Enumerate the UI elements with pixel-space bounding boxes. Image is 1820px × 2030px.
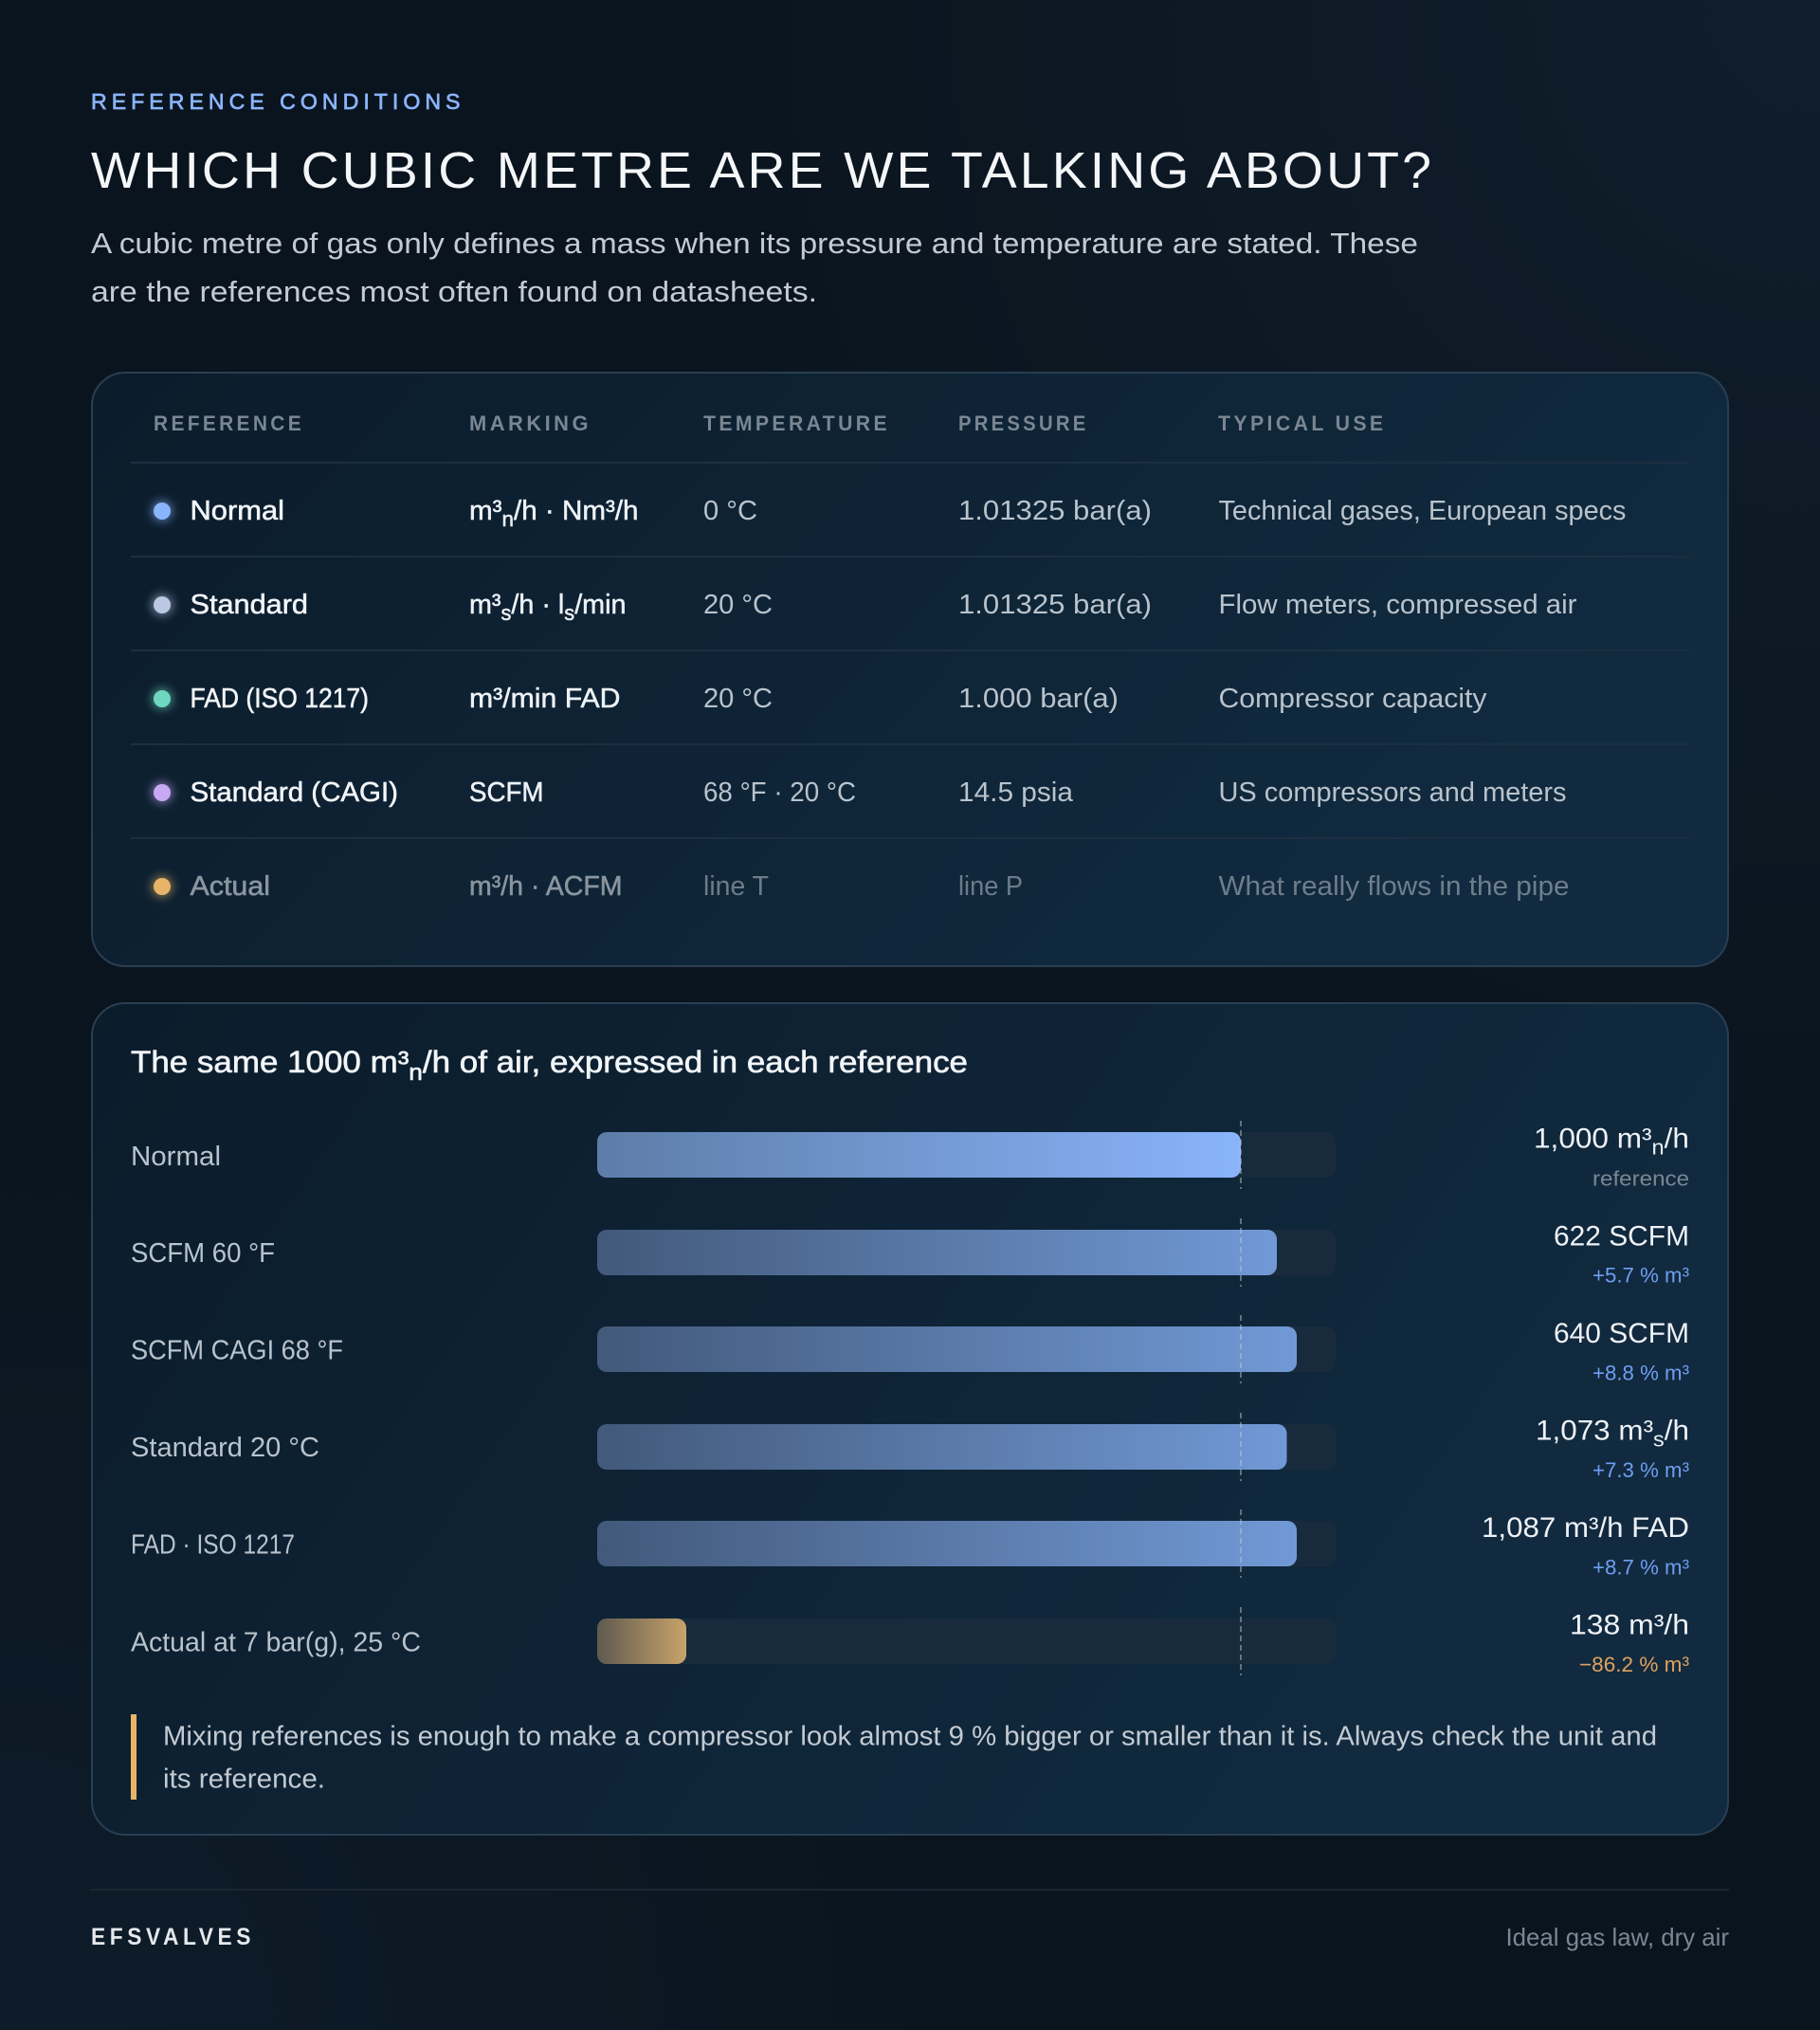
icon: grey-blue dot [152, 594, 173, 615]
subtitle: A cubic metre of gas only defines a mass when its pressure and temperature are stated. These [91, 227, 1418, 260]
row: normal: n [502, 507, 514, 531]
row: normal [152, 496, 1627, 531]
icon: amber dot [152, 876, 173, 897]
row: normal: Technical gases, European specs [1219, 496, 1627, 526]
row: standard CAGI: SCFM [469, 777, 544, 808]
subtitle [91, 227, 1418, 308]
bar row: actual [131, 1607, 1689, 1676]
bar row: FAD: 1,087 m³/h FAD [1482, 1512, 1689, 1544]
row: standard: 20 °C [703, 590, 773, 620]
row: actual: Actual [190, 871, 270, 902]
row: standard: s [564, 601, 574, 625]
bar row: FAD [131, 1509, 1689, 1580]
bar row: normal: /h [1665, 1123, 1689, 1155]
bar row: SCFM CAGI [131, 1315, 1689, 1384]
row: FAD: FAD (ISO 1217) [190, 684, 369, 714]
bar row: SCFM 60F: 622 SCFM [1554, 1221, 1689, 1252]
bar row: standard: +7.3 % m³ [1592, 1458, 1689, 1482]
table header: REFERENCE [154, 411, 304, 435]
bar row: standard: /h [1665, 1415, 1689, 1447]
icon: teal dot [152, 688, 173, 709]
row: normal: Normal [190, 496, 284, 526]
bar row: SCFM CAGI: SCFM CAGI 68 °F [131, 1335, 343, 1365]
bar row: FAD: FAD · ISO 1217 [131, 1530, 295, 1561]
row: actual: line T [703, 871, 769, 902]
bar row: standard: Standard 20 °C [131, 1433, 319, 1463]
row: normal: 0 °C [703, 496, 757, 526]
table header: TEMPERATURE [703, 411, 890, 435]
row: standard CAGI [152, 777, 1566, 808]
row: standard: 1.01325 bar(a) [958, 590, 1152, 620]
bar row: standard [131, 1413, 1689, 1482]
bar row: standard: 1,073 m³ [1536, 1415, 1646, 1447]
bar row: normal: 1,000 m³ [1534, 1123, 1644, 1155]
row: normal: /h · Nm³/h [514, 496, 639, 526]
title: WHICH CUBIC METRE ARE WE TALKING ABOUT? [91, 142, 1434, 199]
row: standard CAGI: 14.5 psia [958, 777, 1074, 808]
callout [131, 1714, 1657, 1800]
bar row: normal: n [1652, 1136, 1665, 1159]
bar row: normal: reference [1592, 1166, 1689, 1191]
footer note: Ideal gas law, dry air [1505, 1923, 1729, 1951]
row: FAD: Compressor capacity [1219, 684, 1487, 714]
row: FAD [152, 684, 1487, 714]
row: actual [152, 871, 1570, 902]
row: standard CAGI: 68 °F · 20 °C [703, 777, 856, 808]
table header: TYPICAL USE [1218, 411, 1386, 435]
row: standard: /h · l [511, 590, 564, 620]
row: FAD: m³/min FAD [469, 684, 620, 714]
row: actual: m³/h · ACFM [469, 871, 622, 902]
table header: MARKING [469, 411, 592, 435]
chart heading: n [409, 1060, 423, 1086]
table header [154, 411, 1386, 435]
header [91, 89, 1434, 308]
bar row: SCFM CAGI: 640 SCFM [1554, 1318, 1689, 1349]
callout: Mixing references is enough to make a compressor look almost 9 % bigger or smaller than it is. Always check the unit and [163, 1722, 1657, 1752]
row: standard: Standard [190, 590, 308, 620]
eyebrow: REFERENCE CONDITIONS [91, 89, 464, 114]
bar row: SCFM CAGI: +8.8 % m³ [1592, 1362, 1689, 1384]
table header: PRESSURE [958, 411, 1088, 435]
row: standard: Flow meters, compressed air [1219, 590, 1577, 620]
row: actual: What really flows in the pipe [1219, 871, 1570, 902]
row: standard [152, 590, 1577, 625]
row: standard: /min [574, 590, 626, 620]
callout: its reference. [163, 1764, 325, 1794]
row: FAD: 20 °C [703, 684, 773, 714]
bar row: actual: −86.2 % m³ [1579, 1653, 1689, 1676]
bar row: FAD: +8.7 % m³ [1592, 1555, 1689, 1580]
subtitle: are the references most often found on datasheets. [91, 275, 817, 308]
brand: EFSVALVES [91, 1924, 255, 1950]
bar row: SCFM 60F [131, 1218, 1689, 1288]
row: standard CAGI: US compressors and meters [1219, 777, 1566, 808]
bar row: normal [131, 1121, 1689, 1191]
row: normal: 1.01325 bar(a) [958, 496, 1152, 526]
chart heading: /h of air, expressed in each reference [423, 1045, 968, 1079]
icon: violet dot [152, 782, 173, 803]
footer [91, 1889, 1729, 1951]
bar row: SCFM 60F: SCFM 60 °F [131, 1238, 275, 1269]
row: FAD: 1.000 bar(a) [958, 684, 1119, 714]
bar row: actual: Actual at 7 bar(g), 25 °C [131, 1627, 421, 1657]
panel: conversion bar chart [92, 1003, 1728, 1835]
row: standard CAGI: Standard (CAGI) [190, 777, 398, 808]
bar row: normal: Normal [131, 1142, 221, 1172]
row: normal: m³ [469, 496, 501, 526]
icon: blue dot [152, 501, 173, 521]
row: standard: s [501, 601, 511, 625]
bar row: actual: 138 m³/h [1570, 1610, 1689, 1640]
row: standard: m³ [469, 590, 501, 620]
bar row: standard: s [1653, 1428, 1665, 1451]
row: actual: line P [958, 871, 1023, 902]
panel: reference table [92, 373, 1728, 966]
chart heading: The same 1000 m³ [131, 1045, 386, 1079]
bar row: SCFM 60F: +5.7 % m³ [1592, 1263, 1689, 1288]
